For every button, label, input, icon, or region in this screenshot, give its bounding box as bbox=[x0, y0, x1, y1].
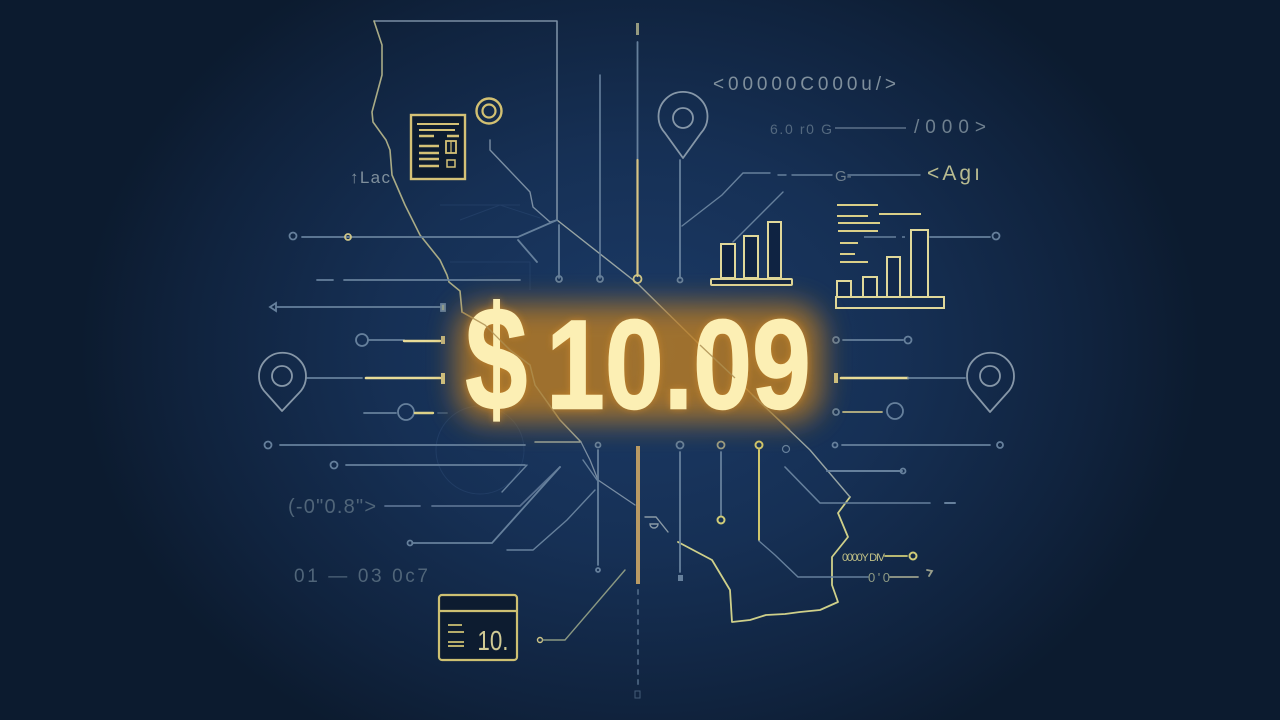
document icon bbox=[411, 115, 465, 179]
small glyph node bbox=[782, 446, 790, 452]
row 2 bbox=[834, 373, 965, 383]
map: north border and east edge bbox=[374, 21, 557, 220]
base bbox=[836, 297, 944, 308]
label: lower left code: 01 — 03 0c7 bbox=[294, 566, 428, 587]
row 2 bbox=[317, 279, 520, 281]
label: left code row: (-0"0.8"> bbox=[288, 496, 376, 518]
label: row two left: 6.0 r0 G bbox=[770, 121, 832, 137]
verticals: bottom bbox=[596, 442, 868, 698]
amount: 10.09 bbox=[546, 293, 811, 436]
text lines bbox=[837, 205, 921, 262]
vertical at 598 bbox=[596, 442, 600, 572]
verticals: top bbox=[556, 23, 920, 283]
window value: 10. bbox=[477, 626, 509, 657]
label: lower right small: 0'0 bbox=[868, 570, 890, 585]
central gold bar bbox=[635, 446, 640, 698]
small bar chart icon bbox=[711, 222, 792, 285]
central vertical top bbox=[634, 23, 642, 283]
map: coast north bbox=[372, 21, 462, 312]
window icon bbox=[439, 595, 517, 660]
label: small node: G- bbox=[835, 168, 852, 185]
vertical at 759 gold bbox=[756, 442, 868, 577]
callout line for window icon bbox=[538, 570, 625, 642]
diagonal branches bbox=[502, 460, 597, 550]
pseudo code labels bbox=[288, 74, 986, 587]
glow text: 10.09 bbox=[546, 293, 811, 436]
lines crossing value bbox=[462, 312, 790, 430]
bars bbox=[837, 230, 928, 297]
vertical at 600 bbox=[597, 75, 603, 282]
glow text: $ bbox=[465, 276, 528, 442]
row 1 bbox=[290, 220, 557, 262]
map: inner connector bbox=[490, 140, 557, 222]
label: left tag: ↑Lac bbox=[350, 168, 390, 187]
circuit lines: left side bbox=[264, 220, 625, 642]
arrow row bbox=[890, 570, 932, 577]
row 6 bbox=[785, 467, 955, 503]
row 3 bbox=[833, 403, 903, 419]
row 10 bbox=[408, 467, 560, 546]
label: lower right gold: 0000Y DIV bbox=[842, 552, 886, 564]
headline value: $10.09 bbox=[456, 276, 822, 442]
map: east diagonal bbox=[557, 220, 850, 497]
target icon bbox=[476, 98, 502, 124]
row 8 bbox=[330, 462, 525, 468]
row 7 bbox=[264, 442, 525, 448]
row 4 bbox=[356, 334, 445, 346]
label: row two right: /000> bbox=[914, 117, 986, 138]
row 3 bbox=[270, 303, 445, 311]
glow halo bbox=[456, 304, 822, 422]
large bar chart with text lines bbox=[836, 205, 944, 308]
pin icon: left bbox=[259, 353, 306, 411]
vertical at 680 bbox=[676, 442, 684, 581]
vertical at 721 with gold node bbox=[718, 442, 724, 524]
pin icon: right bbox=[967, 353, 1014, 412]
map: California outline bbox=[372, 21, 850, 622]
pin stem with branch bbox=[678, 160, 920, 282]
circuit lines: right side bbox=[785, 232, 1003, 577]
map: coast south segment bbox=[462, 312, 581, 442]
label: top code: <00000C000u/> bbox=[713, 74, 896, 95]
row 4 bbox=[832, 442, 1003, 448]
row 9 bbox=[385, 467, 560, 506]
row 5 bbox=[307, 373, 445, 384]
dollar sign: $ bbox=[465, 276, 528, 442]
glow text bbox=[465, 276, 811, 442]
map: coast continuation bbox=[581, 442, 635, 505]
connector bbox=[864, 236, 905, 238]
row 1 bbox=[833, 336, 912, 344]
row 7 gold bbox=[885, 552, 916, 560]
faint background circuitry bbox=[436, 205, 540, 494]
row far-right chart connector bbox=[930, 232, 1000, 240]
connector: row two bbox=[835, 127, 906, 129]
small stray glyph bbox=[645, 517, 668, 532]
row 6 bbox=[364, 404, 447, 420]
row 5 bbox=[827, 468, 906, 474]
label: gold tag: <Agı bbox=[927, 162, 980, 185]
vertical at 560 bbox=[556, 225, 562, 282]
pin icon: top bbox=[658, 92, 708, 158]
map: south coast in gold bbox=[678, 497, 850, 622]
